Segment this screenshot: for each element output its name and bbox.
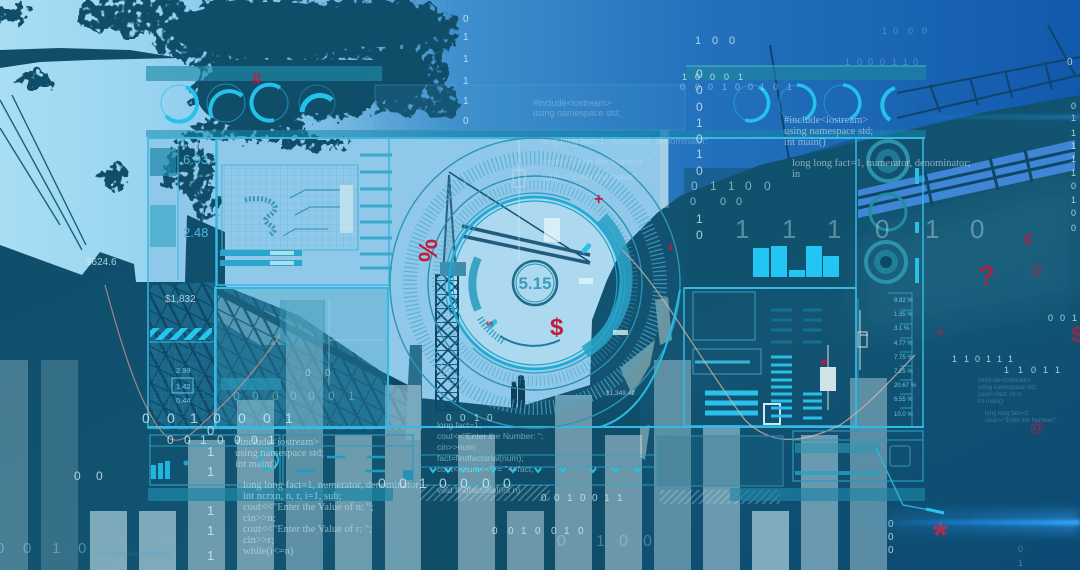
binary digit columns and rows: 1: [463, 54, 469, 65]
binary digit columns and rows: 1: [463, 76, 469, 87]
red symbols: [252, 69, 1080, 557]
binary digit columns and rows: 0010000: [378, 475, 511, 491]
binary digit columns and rows: 1: [207, 548, 214, 563]
gauge row left: [161, 84, 335, 122]
binary digit columns and rows: 0: [463, 116, 469, 127]
binary digit columns and rows: 1: [207, 503, 214, 518]
code block top right: using namespace std;: [784, 126, 873, 137]
centre top outlined strip: [375, 85, 685, 130]
faint code block right: cout<<"Enter the Number";: [985, 418, 1057, 424]
binary digit columns and rows: 1000110: [845, 57, 918, 67]
binary digit columns and rows: 1: [207, 523, 214, 538]
binary digit columns and rows: 0: [1071, 101, 1076, 111]
price labels: $1,832: [165, 294, 196, 305]
binary digit columns and rows: 0: [1071, 181, 1076, 191]
light sheen across right building wall: [858, 175, 1080, 340]
binary digit columns and rows: 0: [1067, 57, 1073, 68]
pale disc inside central dial: [451, 199, 619, 367]
pale debris patches by right scaffold: [620, 130, 672, 460]
red symbols: $: [550, 314, 564, 341]
binary digit columns and rows: 1: [1071, 113, 1076, 123]
HUD frame: right tall column: 3.1 %: [894, 326, 910, 332]
HUD top strip right: [626, 66, 926, 137]
code block top right: long long fact=1, numerator, denominator;: [792, 158, 971, 169]
red symbols: ?: [978, 260, 995, 291]
binary digit columns and rows: 0: [888, 545, 894, 556]
code block lower left: int ncrxn, n, r, i=1, sub;: [243, 491, 342, 502]
binary digit columns and rows: 1: [463, 96, 469, 107]
solid canopy core: [0, 2, 440, 129]
faint code block right: using namespace std;: [978, 385, 1037, 391]
HUD frame: right tall column: 1.35 %: [894, 312, 913, 318]
binary digit columns and rows: 0010010: [492, 526, 584, 537]
centre wave band widget: [418, 455, 780, 504]
binary digit columns and rows: 1: [696, 147, 703, 161]
code block top right: int main(): [784, 137, 826, 148]
binary digit columns and rows: 0: [696, 67, 703, 81]
binary digit columns and rows: 0: [888, 532, 894, 543]
binary digit columns and rows: 1: [1018, 558, 1023, 568]
binary digit columns and rows: 001: [1048, 313, 1077, 323]
HUD frame: lower-left panel: [215, 288, 388, 428]
leafy canopy edges: [0, 0, 460, 221]
HUD frame: right tall column: [856, 138, 923, 427]
HUD frame: right tall column: 7.25 %: [894, 369, 913, 375]
translucent bar chart: [0, 300, 887, 570]
blue lens flare: [60, 115, 1080, 555]
red symbols: *: [668, 241, 674, 257]
binary digit columns and rows: 1000: [882, 26, 927, 36]
code block lower left: int main(): [235, 459, 277, 470]
binary digit columns and rows: 0100: [557, 533, 652, 550]
red symbols: %: [413, 239, 443, 262]
code block lower left: while(i<=n): [243, 546, 294, 557]
faint code block right: [978, 378, 1057, 424]
binary digit columns and rows: 100: [695, 35, 735, 47]
binary digit columns and rows: 0000001: [233, 389, 355, 403]
code snippet left: #include<iostream>: [235, 437, 319, 448]
workers on the roof: [511, 375, 525, 408]
HUD frame: blueprint panel: [217, 138, 392, 285]
code block centre bottom: cout<<num<<"! = "<<fact;: [437, 464, 534, 474]
HUD frame: left column: 2.99: [176, 366, 191, 375]
HUD frame: right chart panel: [684, 138, 856, 426]
right building roof rail: [770, 25, 1080, 165]
HUD top strip left: [146, 66, 626, 137]
faint code block right: cout<<fact; int n;: [978, 392, 1023, 398]
trend curve right: [622, 250, 915, 439]
central HUD dial: [390, 138, 680, 428]
code block centre bottom: void findfactorial(int n): [437, 485, 520, 495]
HUD frame: left column: 0.44: [176, 396, 191, 405]
binary digit columns and rows: 00: [74, 469, 103, 483]
faint code block centre top: cout<<"Enter the Number: ";: [541, 157, 653, 167]
faint code block right: #include<iostream>: [978, 378, 1031, 384]
binary digit columns and rows: 000100101: [680, 82, 792, 92]
binary digit columns and rows: 0: [696, 100, 703, 114]
window band on right building: [858, 140, 1075, 218]
HUD frame: left column: [148, 138, 216, 428]
code block centre bottom: cin>>num;: [437, 442, 477, 452]
binary digit columns and rows: 1: [1071, 168, 1076, 178]
binary digit columns and rows: 0: [1071, 223, 1076, 233]
sweeping HUD arc right: [600, 290, 680, 427]
binary digit columns and rows: 0010001: [142, 410, 293, 426]
binary digit columns and rows: 1: [1071, 128, 1076, 138]
HUD frame: right tall column: 10.0 %: [894, 412, 913, 418]
red symbols: *: [933, 515, 948, 557]
binary digit columns and rows: 110111: [952, 354, 1013, 364]
scaffold structure: [150, 282, 422, 440]
code block centre bottom: long fact=1;: [437, 420, 481, 430]
cyan column chart: [753, 246, 839, 277]
stripe meters: [771, 310, 822, 418]
code block top right: [784, 115, 971, 180]
red symbols: €: [1024, 230, 1034, 249]
binary digit columns and rows: 1: [463, 32, 469, 43]
dial value: 5.15: [518, 274, 552, 293]
HUD frame: left column: 2.48: [183, 225, 208, 240]
binary digit columns and rows: 0: [463, 14, 469, 25]
lower-right widget row: [657, 431, 944, 513]
price labels: $624.6: [86, 257, 117, 268]
red symbols: #: [252, 69, 262, 88]
crane on the left: [0, 95, 86, 250]
red symbols: $: [484, 320, 495, 327]
code block centre bottom: [437, 420, 543, 495]
HUD frame: right tall column: 20.67 %: [894, 383, 917, 389]
binary digit columns and rows: 0: [207, 423, 214, 438]
binary digit columns and rows: 1: [207, 444, 214, 459]
red symbols: *: [937, 326, 944, 346]
code block centre bottom: cout<<"Enter the Number: ";: [437, 431, 543, 441]
lower-left widget row: [148, 435, 413, 501]
dial capsule markers: [486, 242, 592, 330]
red symbols: @: [1030, 261, 1044, 277]
dial white blocks: [544, 218, 628, 335]
code block centre bottom: fact=findfactorial(num);: [437, 453, 524, 463]
trend curve left: [105, 285, 280, 440]
gauge row right: [734, 85, 895, 121]
vertical dial bracket: [513, 140, 525, 260]
faint code block right: int main(): [978, 399, 1003, 405]
crane tower at centre: [436, 172, 590, 410]
HUD frame: main horizontal rule: [148, 138, 925, 427]
binary digit columns and rows: 10001: [682, 72, 743, 82]
code block lower left: cin>>n;: [243, 513, 276, 524]
binary digit columns and rows: 11011: [1004, 365, 1060, 375]
code block top right: in: [792, 169, 801, 180]
binary digit columns and rows: 0: [696, 164, 703, 178]
binary digit columns and rows: 0010001: [167, 433, 275, 447]
code block lower left: using namespace std;: [235, 448, 324, 459]
binary digit columns and rows: 00: [305, 368, 331, 379]
centre-lower building slab: [420, 395, 640, 570]
pale panel area behind HUD: [148, 138, 668, 428]
binary digit columns and rows: 01100: [691, 179, 771, 193]
red symbols: +: [594, 191, 603, 208]
code block lower left: cout<<"Enter the Value of n: ";: [243, 502, 374, 513]
HUD frame: right tall column: 7.75 %: [894, 355, 913, 361]
binary digit columns and rows: 1: [696, 116, 703, 130]
binary digit columns and rows: 000: [690, 196, 742, 208]
faint code block centre top: [533, 98, 708, 182]
tree canopy: [0, 0, 460, 221]
binary digit columns and rows: 1: [207, 464, 214, 479]
price labels: $1,349.42: [606, 390, 635, 397]
code block top right: #include<iostream>: [784, 115, 868, 126]
faint code block right: long long fact=1;: [985, 411, 1030, 417]
faint code block centre top: #include<iostream>: [533, 98, 612, 108]
binary digit columns and rows: 0: [1018, 544, 1023, 554]
code block lower left: cout<<"Enter the Value of r: ";: [243, 524, 372, 535]
binary digit columns and rows: 0010011: [541, 493, 623, 504]
binary digit columns and rows: 0: [888, 519, 894, 530]
HUD frame: right tall column: 8.82 %: [894, 298, 913, 304]
HUD frame: left column: 1.42: [176, 382, 191, 391]
binary digit columns and rows: 1: [696, 212, 703, 226]
red symbols: @: [1030, 419, 1045, 436]
code block lower left: cin>>r;: [243, 535, 274, 546]
faint code block centre top: cout<<"Enter the Value";: [541, 172, 639, 182]
code block lower left: [235, 448, 422, 557]
binary digit columns and rows: 0010: [446, 413, 493, 424]
code block lower left: long long fact=1, numerator, denominator;: [243, 480, 422, 491]
HUD frame: left column: 6.93: [183, 152, 208, 167]
binary digit columns and rows: 0: [696, 83, 703, 97]
binary digit columns and rows: 0: [696, 228, 703, 242]
HUD frame: right tall column: 6.55 %: [894, 397, 913, 403]
faint code block centre top: long long fact=1, numerator, denominator;: [541, 136, 708, 146]
price labels: [86, 257, 635, 397]
faint code block centre top: using namespace std;: [533, 108, 621, 118]
binary digit columns and rows: 0: [1071, 208, 1076, 218]
binary digit columns and rows: 0: [696, 132, 703, 146]
binary digit columns and rows: 1: [1071, 154, 1076, 164]
binary digit columns and rows: 111010: [735, 214, 984, 244]
binary digit columns and rows: 1: [1071, 195, 1076, 205]
HUD frame: right tall column: 4.77 %: [894, 341, 913, 347]
binary digit columns and rows: 1: [1071, 141, 1076, 151]
